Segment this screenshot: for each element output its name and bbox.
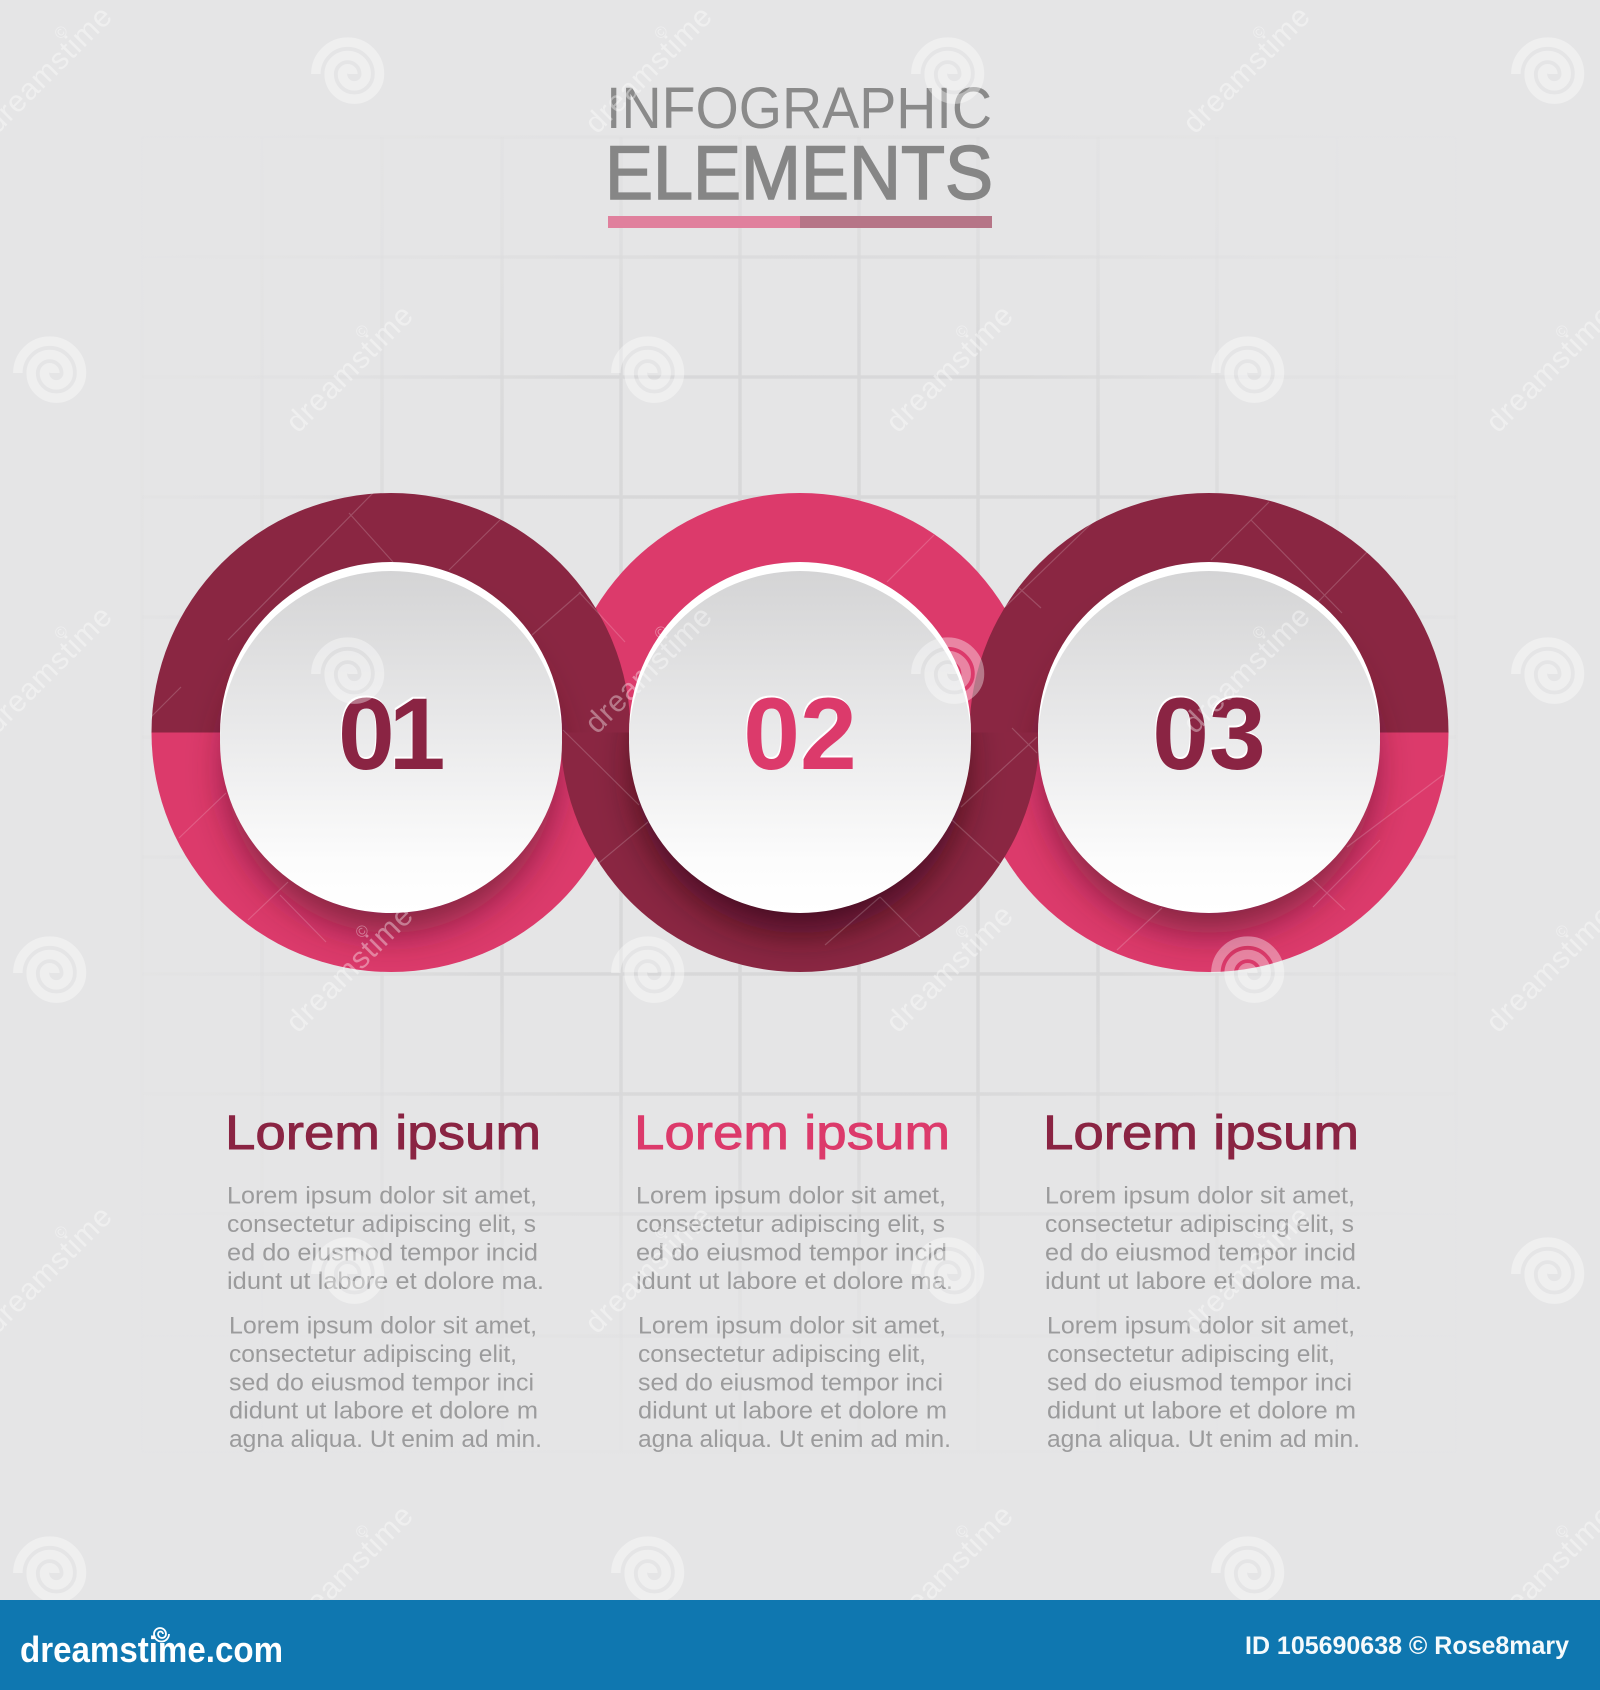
column 3 heading: Lorem ipsum bbox=[1043, 1107, 1359, 1160]
column 2 paragraph 1: idunt ut labore et dolore ma. bbox=[636, 1268, 953, 1295]
watermark wordmarks: © bbox=[51, 623, 72, 643]
watermark wordmarks: dreamstime bbox=[880, 299, 1020, 439]
ring 1 bbox=[152, 493, 630, 972]
column 1 paragraph 2: sed do eiusmod tempor inci bbox=[229, 1370, 534, 1396]
disc 01 bbox=[220, 562, 562, 913]
column 3 paragraph 2: sed do eiusmod tempor inci bbox=[1047, 1370, 1352, 1396]
watermark wordmarks: dreamstime bbox=[880, 899, 1020, 1039]
number 02: 02 bbox=[743, 677, 857, 791]
watermark wordmarks: © bbox=[651, 23, 672, 43]
watermark wordmarks: © bbox=[352, 922, 373, 942]
disc 02 bbox=[629, 562, 971, 913]
ring 2 upper half bbox=[560, 493, 1040, 732]
footer image id and credit: ID 105690638 © Rose8mary bbox=[1245, 1632, 1569, 1660]
column 3 paragraph 2: Lorem ipsum dolor sit amet, bbox=[1047, 1312, 1355, 1340]
column 2 paragraph 1 bbox=[636, 1182, 953, 1295]
watermark wordmarks: dreamstime bbox=[280, 299, 420, 439]
watermark wordmarks: dreamstime bbox=[579, 0, 719, 140]
column 1 paragraph 2: Lorem ipsum dolor sit amet, bbox=[229, 1312, 537, 1340]
watermark wordmarks: © bbox=[651, 1223, 672, 1243]
column 2 paragraph 2 bbox=[638, 1312, 951, 1453]
watermark wordmarks: © bbox=[1552, 322, 1573, 342]
ring 2 lower half bbox=[562, 732, 1038, 972]
column 1 paragraph 1 bbox=[227, 1182, 544, 1295]
column 3 paragraph 2: agna aliqua. Ut enim ad min. bbox=[1047, 1426, 1360, 1453]
watermark wordmarks: © bbox=[651, 623, 672, 643]
column 1 paragraph 1: consectetur adipiscing elit, s bbox=[227, 1211, 536, 1238]
watermark wordmarks: dreamstime bbox=[280, 899, 420, 1039]
column 1 paragraph 1: Lorem ipsum dolor sit amet, bbox=[227, 1182, 537, 1210]
watermark wordmarks: © bbox=[952, 1522, 973, 1542]
column 3 paragraph 1: idunt ut labore et dolore ma. bbox=[1045, 1268, 1362, 1295]
column 2 paragraph 2: agna aliqua. Ut enim ad min. bbox=[638, 1426, 951, 1453]
watermark wordmarks: © bbox=[1249, 623, 1270, 643]
watermark wordmarks: © bbox=[352, 322, 373, 342]
watermark wordmarks: dreamstime bbox=[579, 1200, 719, 1340]
title line: elements: ELEMENTS bbox=[605, 131, 993, 216]
icon: logo spiral bbox=[154, 1628, 169, 1642]
ring 3 bbox=[970, 493, 1448, 972]
watermark wordmarks: dreamstime bbox=[1177, 0, 1317, 140]
watermark wordmarks: © bbox=[1552, 1522, 1573, 1542]
watermark wordmarks: © bbox=[352, 1522, 373, 1542]
column 1 paragraph 2: agna aliqua. Ut enim ad min. bbox=[229, 1426, 542, 1453]
background tile grid bbox=[142, 137, 1456, 1452]
watermark wordmarks: dreamstime bbox=[1177, 1200, 1317, 1340]
column 3 paragraph 1: consectetur adipiscing elit, s bbox=[1045, 1211, 1354, 1238]
column 3 paragraph 1: ed do eiusmod tempor incid bbox=[1045, 1240, 1356, 1266]
column 3 paragraph 2: didunt ut labore et dolore m bbox=[1047, 1398, 1356, 1424]
title line: infographic: INFOGRAPHIC bbox=[606, 76, 992, 141]
watermark wordmarks: © bbox=[1249, 1223, 1270, 1243]
column 1 text bbox=[225, 1107, 544, 1453]
footer bar bbox=[0, 1600, 1600, 1690]
watermark wordmarks: © bbox=[51, 23, 72, 43]
column 2 paragraph 1: ed do eiusmod tempor incid bbox=[636, 1240, 947, 1266]
footer logo: dreamstime.com bbox=[20, 1629, 283, 1670]
watermark thin lines bbox=[151, 493, 1443, 950]
column 1 paragraph 1: idunt ut labore et dolore ma. bbox=[227, 1268, 544, 1295]
column 3 paragraph 2: consectetur adipiscing elit, bbox=[1047, 1341, 1335, 1368]
column 2 text bbox=[634, 1107, 953, 1453]
column 3 paragraph 2 bbox=[1047, 1312, 1360, 1453]
watermark wordmarks: © bbox=[1552, 922, 1573, 942]
interlinked rings bbox=[152, 493, 1448, 972]
column 1 heading: Lorem ipsum bbox=[225, 1107, 541, 1160]
column 2 paragraph 1: Lorem ipsum dolor sit amet, bbox=[636, 1182, 946, 1210]
column 3 paragraph 1: Lorem ipsum dolor sit amet, bbox=[1045, 1182, 1355, 1210]
column 2 paragraph 2: Lorem ipsum dolor sit amet, bbox=[638, 1312, 946, 1340]
number 03: 03 bbox=[1152, 677, 1266, 791]
column 1 paragraph 2 bbox=[229, 1312, 542, 1453]
title bbox=[605, 76, 993, 228]
watermark wordmarks: dreamstime bbox=[280, 1499, 420, 1639]
watermark wordmarks: © bbox=[1249, 23, 1270, 43]
number 01: 01 bbox=[338, 677, 443, 791]
watermark wordmarks: © bbox=[51, 1223, 72, 1243]
column 1 paragraph 1: ed do eiusmod tempor incid bbox=[227, 1240, 538, 1266]
column 2 paragraph 2: sed do eiusmod tempor inci bbox=[638, 1370, 943, 1396]
title underline bbox=[608, 216, 992, 228]
disc 03 bbox=[1038, 562, 1380, 913]
column 1 paragraph 2: consectetur adipiscing elit, bbox=[229, 1341, 517, 1368]
watermark wordmarks: dreamstime bbox=[880, 1499, 1020, 1639]
column 2 heading: Lorem ipsum bbox=[634, 1107, 950, 1160]
column 2 paragraph 2: consectetur adipiscing elit, bbox=[638, 1341, 926, 1368]
watermark wordmarks: dreamstime bbox=[579, 600, 719, 740]
column 2 paragraph 2: didunt ut labore et dolore m bbox=[638, 1398, 947, 1424]
column 2 paragraph 1: consectetur adipiscing elit, s bbox=[636, 1211, 945, 1238]
watermark wordmarks: © bbox=[952, 322, 973, 342]
column 3 paragraph 1 bbox=[1045, 1182, 1362, 1295]
watermark wordmarks: © bbox=[952, 922, 973, 942]
column 3 text bbox=[1043, 1107, 1362, 1453]
column 1 paragraph 2: didunt ut labore et dolore m bbox=[229, 1398, 538, 1424]
watermark wordmarks: dreamstime bbox=[1177, 600, 1317, 740]
